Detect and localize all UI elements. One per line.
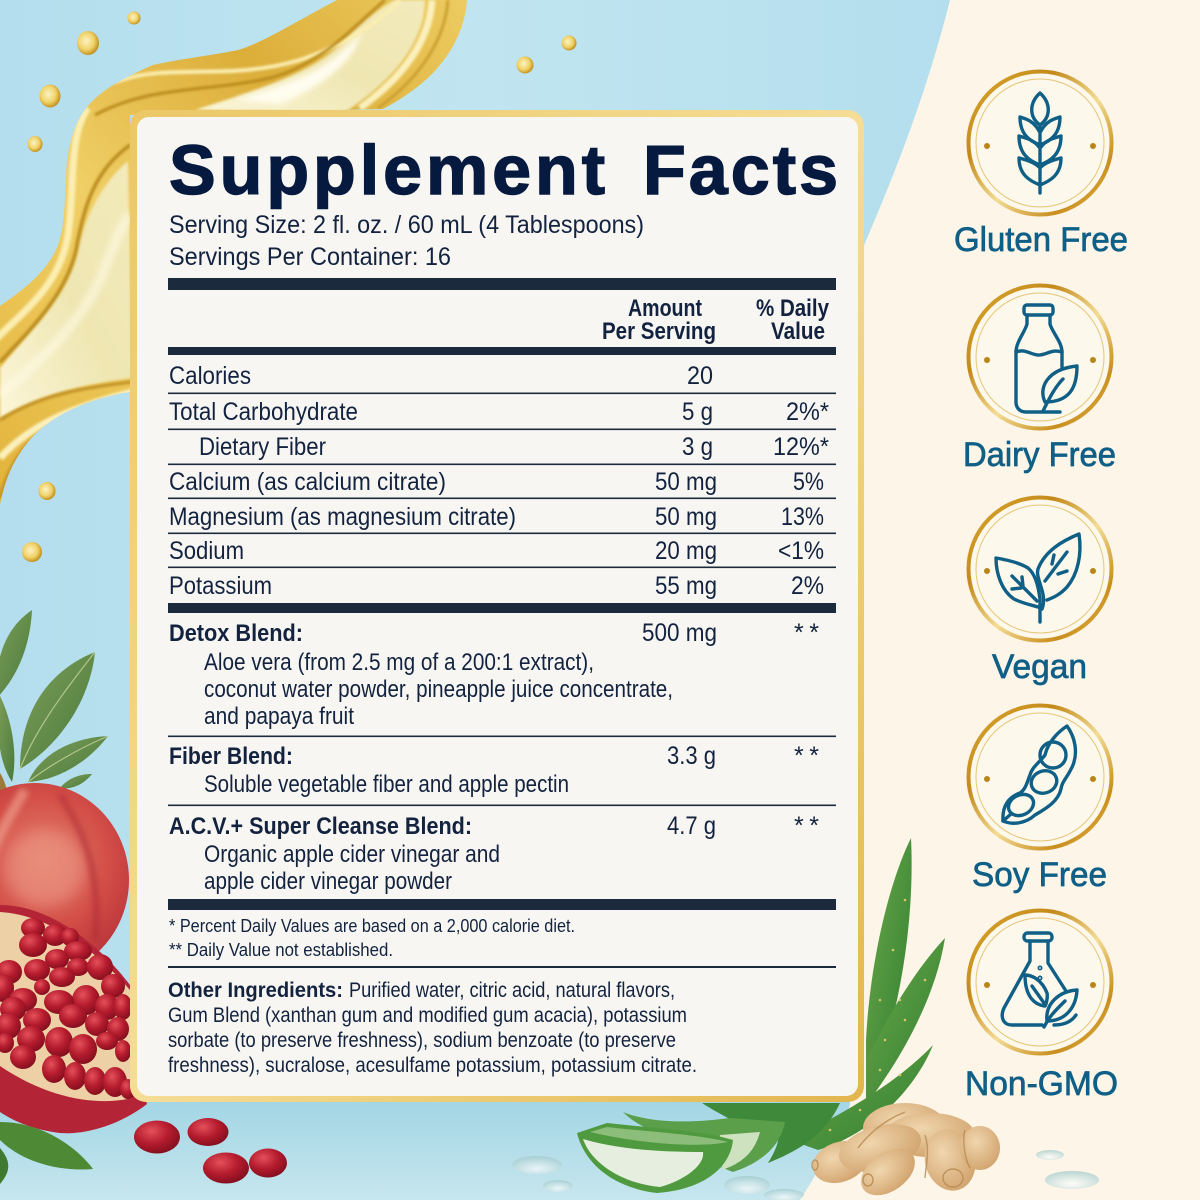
table header: Per Serving	[602, 318, 716, 345]
nutrient rows: 5 g	[682, 398, 713, 426]
badge: gluten free	[968, 72, 1112, 214]
A.C.V. blend: apple cider vinegar powder	[204, 868, 452, 895]
footnotes: * Percent Daily Values are based on a 2,000 calorie diet.	[169, 915, 575, 936]
nutrient rows: Calcium (as calcium citrate)	[169, 468, 446, 496]
footnotes	[168, 915, 836, 968]
nutrient rows: Total Carbohydrate	[169, 398, 358, 426]
nutrient rows: <1%	[778, 537, 824, 565]
detox blend: 500 mg	[642, 619, 717, 647]
nutrient rows: 20	[687, 362, 713, 390]
golden liquid wave	[0, 0, 480, 510]
A.C.V. blend: 4.7 g	[667, 812, 716, 840]
label: non-gmo: Non-GMO	[965, 1065, 1118, 1103]
detox blend	[168, 619, 836, 737]
nutrient rows: Potassium	[169, 572, 272, 600]
nutrient rows: 3 g	[682, 433, 713, 461]
badge: non-gmo	[968, 910, 1112, 1054]
nutrient rows	[168, 362, 836, 613]
table header: Amount	[628, 295, 702, 322]
table header: % Daily	[756, 295, 830, 322]
nutrient rows: 2%	[791, 572, 824, 600]
table header: Value	[771, 318, 825, 345]
other ingredients	[168, 978, 697, 1077]
A.C.V. blend	[168, 812, 836, 910]
fiber blend	[168, 742, 836, 806]
nutrient rows: 2%*	[786, 398, 829, 426]
badge: dairy free	[968, 286, 1112, 428]
label: vegan: Vegan	[992, 648, 1087, 686]
gold droplets	[22, 12, 576, 562]
A.C.V. blend: * *	[794, 812, 819, 840]
nutrient rows: 20 mg	[655, 537, 717, 565]
label: dairy free: Dairy Free	[963, 436, 1116, 474]
serving info: Serving Size: 2 fl. oz. / 60 mL (4 Tablespoons)	[169, 211, 644, 239]
icon: soybean pod	[1003, 726, 1075, 823]
nutrient rows: Calories	[169, 362, 251, 390]
nutrient rows: Dietary Fiber	[199, 433, 326, 461]
title: Supplement	[169, 131, 605, 209]
fiber blend: 3.3 g	[667, 742, 716, 770]
detox blend: Aloe vera (from 2.5 mg of a 200:1 extract),	[204, 649, 594, 676]
label: gluten free: Gluten Free	[954, 221, 1128, 259]
nutrient rows: 50 mg	[655, 468, 717, 496]
table header	[168, 278, 836, 355]
background: cream panel	[800, 0, 1200, 1200]
supplement facts panel	[130, 110, 864, 1102]
detox blend: Detox Blend:	[169, 620, 303, 647]
ginger root	[807, 1103, 1000, 1200]
A.C.V. blend: Organic apple cider vinegar and	[204, 841, 500, 868]
fiber blend: Fiber Blend:	[169, 743, 293, 770]
fiber blend: * *	[794, 742, 819, 770]
other ingredients: freshness), sucralose, acesulfame potassium, potassium citrate.	[168, 1053, 697, 1077]
serving info: Servings Per Container: 16	[169, 243, 451, 271]
aloe leaves	[702, 838, 945, 1163]
cut pomegranate	[0, 905, 147, 1133]
footnotes: ** Daily Value not established.	[169, 939, 393, 960]
detox blend: and papaya fruit	[204, 703, 354, 730]
icon: bottle with leaf	[1016, 305, 1077, 412]
bottom pomegranate leaves	[0, 1122, 93, 1184]
nutrient rows: 55 mg	[655, 572, 717, 600]
water droplets	[512, 1150, 1099, 1200]
other ingredients: Gum Blend (xanthan gum and modified gum acacia), potassium	[168, 1003, 687, 1027]
pomegranate leaves	[0, 610, 108, 788]
detox blend: * *	[794, 619, 819, 647]
serving info	[169, 211, 644, 271]
other ingredients: Purified water, citric acid, natural flavors,	[349, 978, 675, 1002]
nutrient rows: Sodium	[169, 537, 244, 565]
badge: soy free	[968, 706, 1112, 848]
icon: wheat	[1019, 93, 1061, 193]
icon: leaves	[996, 534, 1080, 622]
aloe slices	[577, 1112, 785, 1193]
pomegranate arils	[134, 1118, 287, 1184]
nutrient rows: 12%*	[773, 433, 829, 461]
nutrient rows: 50 mg	[655, 503, 717, 531]
A.C.V. blend: A.C.V.+ Super Cleanse Blend:	[169, 813, 472, 840]
other ingredients: sorbate (to preserve freshness), sodium benzoate (to preserve	[168, 1028, 676, 1052]
label: soy free: Soy Free	[972, 856, 1107, 894]
background: table surface	[0, 1102, 860, 1200]
nutrient rows: Magnesium (as magnesium citrate)	[169, 503, 516, 531]
title	[169, 131, 838, 209]
other ingredients: Other Ingredients:	[168, 978, 343, 1002]
detox blend: coconut water powder, pineapple juice concentrate,	[204, 676, 673, 703]
nutrient rows: 5%	[793, 468, 824, 496]
badge: vegan	[968, 498, 1112, 640]
whole pomegranate	[0, 773, 129, 951]
nutrient rows: 13%	[781, 503, 824, 531]
fiber blend: Soluble vegetable fiber and apple pectin	[204, 771, 569, 798]
title: Facts	[643, 131, 838, 209]
icon: flask with leaves	[1002, 933, 1077, 1027]
